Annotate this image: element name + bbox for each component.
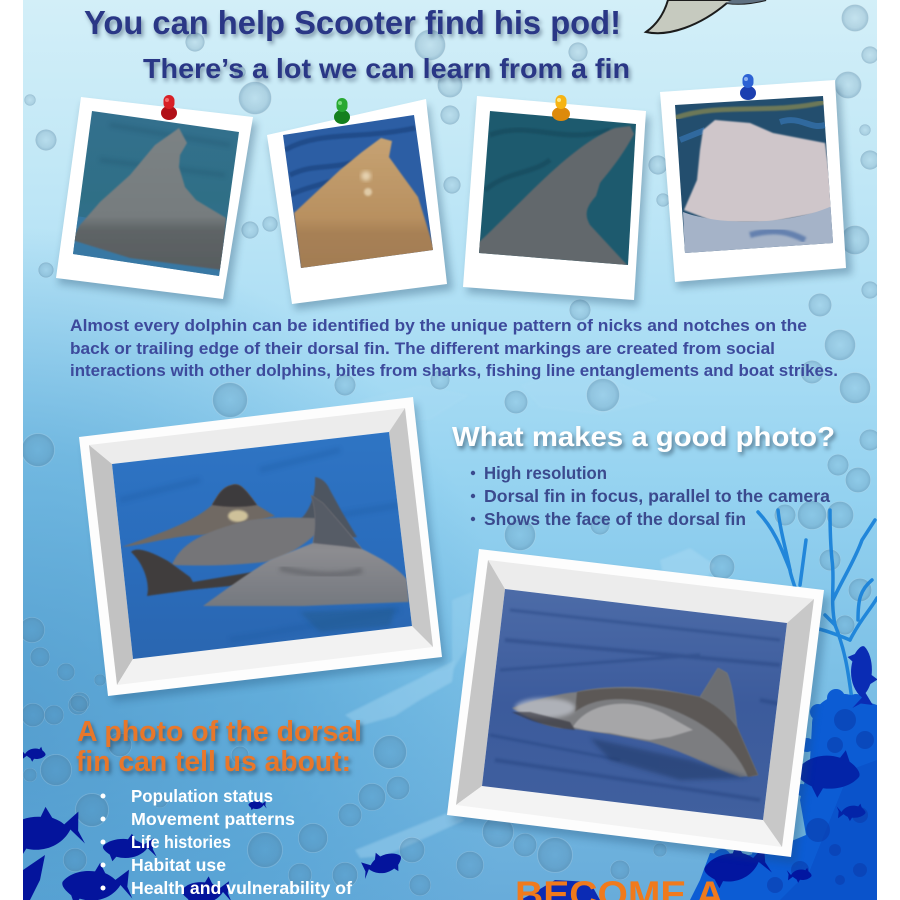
subtitle: There’s a lot we can learn from a fin [143, 53, 630, 84]
dolphin: mother [512, 668, 758, 777]
splash [515, 698, 575, 718]
icon: yellow pin [552, 95, 570, 121]
dorsal fin [684, 120, 834, 222]
fish group [3, 646, 878, 900]
dolphin: middle [300, 477, 357, 540]
icon: fish right side [800, 750, 860, 798]
framed photo: group of dolphins [79, 397, 446, 702]
list: what a photo tells us [100, 786, 352, 898]
heading: what a dorsal fin photo tells us: fin can tell us about: [76, 746, 351, 778]
dorsal fin [294, 138, 435, 270]
dolphin: back [122, 484, 275, 547]
heading: what a dorsal fin photo tells us [76, 716, 362, 778]
list: good photo criteria: High resolution [484, 463, 607, 483]
polaroid: fin photo 1 [56, 97, 257, 305]
icon: blue pin [740, 74, 756, 100]
dolphin: calf [573, 704, 693, 740]
icon: fish left side [21, 747, 46, 762]
paragraph: dorsal fin identification: Almost every dolphin can be identified by the unique pattern of nicks and notches on the [70, 317, 807, 335]
list: what a photo tells us: Life histories [131, 832, 231, 852]
dorsal fin [72, 128, 226, 270]
paragraph: dorsal fin identification: interactions with other dolphins, bites from sharks, fishing line entanglements and boat strikes. [70, 362, 838, 380]
framed photo: mother and calf [447, 549, 830, 864]
list: what a photo tells us: Population status [131, 786, 273, 806]
list: good photo criteria: Dorsal fin in focus, parallel to the camera [484, 486, 830, 506]
heading: what makes a good photo: What makes a good photo? [452, 421, 835, 452]
title: You can help Scooter find his pod! [84, 4, 621, 41]
icon: dolphin tail [646, 0, 766, 33]
list: good photo criteria: Shows the face of the dorsal fin [484, 509, 746, 529]
list: what a photo tells us: Habitat use [131, 855, 226, 875]
icon: green pin [334, 98, 350, 124]
dorsal fin [478, 126, 634, 266]
list: what a photo tells us: Health and vulnerability of [131, 878, 352, 898]
list: good photo criteria [471, 463, 830, 529]
polaroid: fin photo 2 [267, 99, 453, 310]
coral branches [758, 510, 877, 700]
light water splashes [346, 549, 714, 858]
list: what a photo tells us: Movement patterns [131, 809, 295, 829]
dolphin: left fin [131, 550, 253, 596]
polaroid: fin photo 4 [660, 80, 852, 288]
paragraph: dorsal fin identification [70, 317, 838, 380]
coral reef [690, 689, 877, 900]
paragraph: dorsal fin identification: back or trailing edge of their dorsal fin. The different markings are created from social [70, 340, 775, 358]
polaroid: fin photo 3 [463, 96, 650, 306]
dolphin: front [203, 495, 409, 606]
heading: what a dorsal fin photo tells us: A photo of the dorsal [77, 716, 362, 748]
icon: red pin [161, 95, 177, 120]
